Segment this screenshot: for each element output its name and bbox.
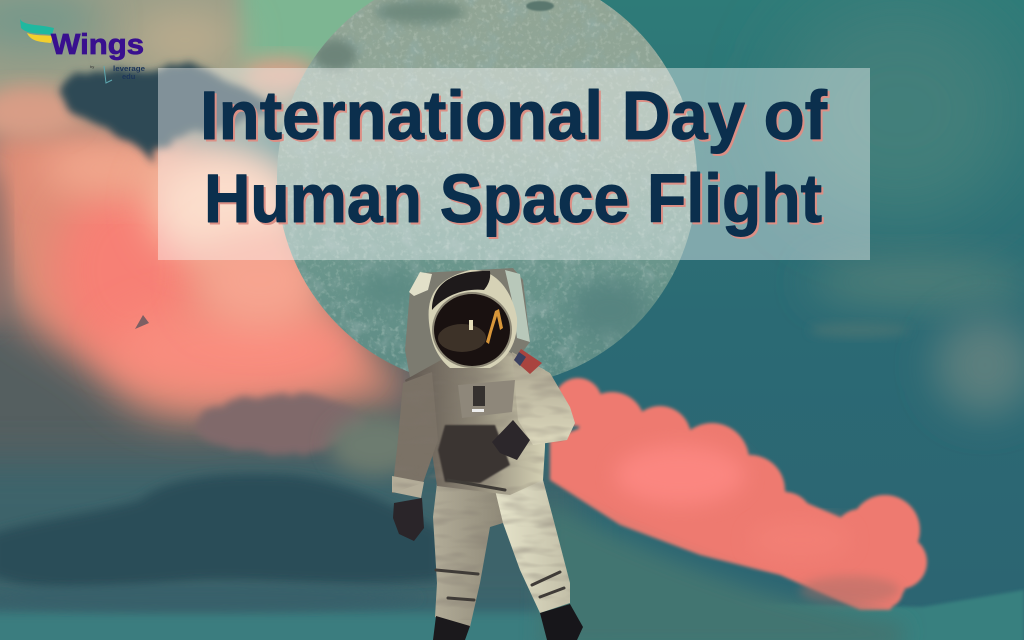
visor reflection <box>438 309 503 352</box>
backpack <box>405 268 530 378</box>
cloud: salmon right <box>550 378 927 610</box>
chest shadow <box>438 425 510 483</box>
logo byline: edu <box>122 72 136 81</box>
logo flag mark <box>20 19 54 43</box>
left glove <box>393 498 424 541</box>
right leg <box>495 480 570 613</box>
cloud: dark upper left <box>58 62 285 165</box>
cloud: haze under right cloud <box>540 500 905 640</box>
right glove <box>492 420 530 460</box>
logo wordmark: Wings <box>51 29 144 61</box>
title panel <box>158 68 870 260</box>
torso <box>405 350 545 495</box>
cloud: brown lower billow <box>195 395 420 475</box>
left arm <box>392 372 438 493</box>
suit wrinkle texture <box>394 352 570 612</box>
leg folds <box>436 480 564 600</box>
title: International Day of <box>200 77 828 154</box>
title: International Day of <box>202 79 830 156</box>
left leg <box>433 483 505 627</box>
left boot <box>433 616 470 640</box>
logo: Wings by Leverage Edu <box>20 19 145 83</box>
cloud: lower left base <box>0 300 580 640</box>
helmet <box>429 270 517 368</box>
right boot <box>540 604 583 640</box>
right arm <box>512 352 575 445</box>
chest control unit <box>458 380 515 418</box>
left cuff <box>392 476 424 498</box>
astronaut <box>390 268 583 640</box>
logo byline <box>90 64 145 83</box>
flag patch <box>514 349 542 374</box>
moon <box>270 0 710 390</box>
cloud: top left haze <box>0 0 400 130</box>
logo byline: leverage <box>113 64 145 73</box>
cloud: salmon left <box>0 86 412 419</box>
title <box>200 77 830 239</box>
title: Human Space Flight <box>204 160 822 237</box>
small paper plane <box>135 315 149 329</box>
logo byline: by <box>90 64 94 69</box>
title: Human Space Flight <box>206 162 824 239</box>
cloud: dark lower band <box>0 474 440 610</box>
